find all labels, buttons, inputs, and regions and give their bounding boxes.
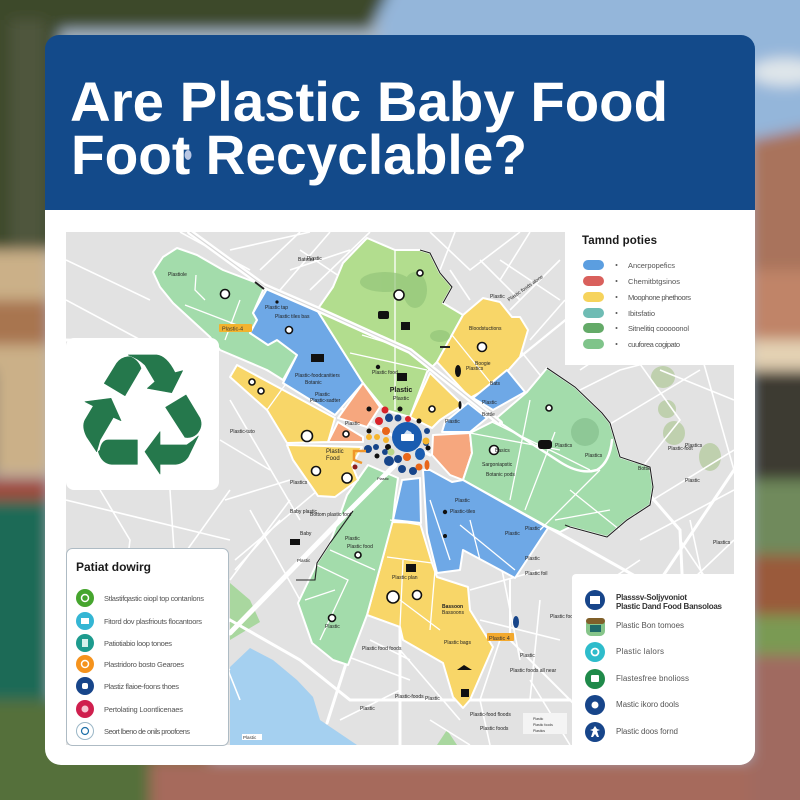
tiny map labels: Sargoniapstic [482, 462, 513, 468]
zone: west yellow [230, 365, 335, 443]
panel: bottom right legend: Plastic lalors [616, 647, 664, 656]
tiny map labels: Baby plastic [290, 509, 317, 515]
secondary roads [66, 319, 734, 745]
tiny map labels: Plastic [425, 696, 440, 702]
panel: bottom right legend: Plasssv-Soljyvoniot [616, 593, 687, 602]
panel: legend top right: Ancerpopefics [628, 261, 675, 270]
panel: bottom right legend: Flastesfree bnolioss [616, 674, 689, 683]
tiny map labels: Boogie [475, 361, 491, 367]
small map key: Plastic foods [533, 723, 553, 727]
tiny map labels: Bateau [298, 257, 314, 263]
panel: left legend: Plastridoro bosto Gearoes [104, 660, 184, 669]
tiny map labels: Plastic [345, 421, 360, 427]
panel: legend top right: Ibitsfatio [628, 309, 655, 318]
tiny map labels: Plastic foods all near [510, 668, 556, 674]
zone: east green [463, 368, 653, 537]
tiny map labels: Botanic pods [486, 472, 515, 478]
small map key: Plastic [533, 717, 544, 721]
tiny map labels: Bassoons [442, 610, 464, 616]
tiny map labels: Plastic-sadter [310, 398, 341, 404]
tiny map labels: Plastics [466, 366, 484, 372]
orange map tags: Plastic-4 [222, 326, 243, 332]
panel: legend top right [565, 222, 755, 365]
small map key: Plastics [533, 729, 545, 733]
zone: west salmon upper [338, 383, 380, 427]
tiny map labels: Plastic [490, 294, 505, 300]
zone: west salmon lower [328, 422, 363, 442]
darker lime patches [360, 272, 450, 342]
tiny map labels: Plastic food [372, 370, 398, 376]
title blemish [184, 150, 192, 160]
zone: south-west yellow [287, 445, 362, 497]
tiny map labels: Bottle [482, 412, 495, 418]
panel: bottom right legend: Plastic doos fornd [616, 727, 678, 736]
zone: north yellow [437, 298, 528, 398]
zone: south-east blue [423, 470, 548, 578]
orange map tags [219, 324, 519, 642]
panel: bottom right legend: Plastic Bon tomoes [616, 621, 684, 630]
panel: left legend: Pertolating Loontlicenaes [104, 705, 183, 714]
tiny map labels: Plastics [290, 480, 308, 486]
small map key [523, 713, 567, 734]
panel: legend top right: cuuforea cogipato [628, 340, 680, 349]
zone: south green [298, 465, 398, 665]
tiny map labels: Plastic foods [480, 726, 509, 732]
park patches [651, 366, 721, 471]
tiny map labels: Plastic tiles bas [275, 314, 310, 320]
tiny map labels: Plastic [297, 558, 311, 563]
panel: bottom right legend [572, 574, 755, 765]
zone: north-west blue [250, 287, 363, 415]
title [70, 70, 668, 186]
tiny map labels: Plastic [345, 536, 360, 542]
tiny map labels: Plastic [505, 531, 520, 537]
legend heading: Tamnd poties [582, 235, 657, 247]
water label [242, 734, 262, 740]
title: Foot Recyclable? [71, 123, 527, 186]
zone: inner blue [442, 403, 487, 432]
tiny map labels: Plastics [713, 540, 731, 546]
panel: left legend: Fitord dov plasfriouts flocantoors [104, 617, 202, 626]
zone: north-west green [153, 248, 297, 380]
tiny map labels: Bassoon [442, 604, 463, 610]
tiny map labels: Plastic [445, 419, 460, 425]
tiny map labels: Plastic food foods [362, 646, 402, 652]
main highways [190, 232, 612, 633]
zone: east salmon [432, 433, 472, 480]
tiny map labels: Plastic-foods [395, 694, 424, 700]
white content card [45, 210, 755, 765]
dark district outlines [255, 250, 653, 580]
tiny map labels: Plastic-tuto [230, 429, 255, 435]
panel: bottom right legend: Plastic Dand Food Bansoloas [616, 602, 723, 611]
tiny map labels: Bottle [638, 466, 651, 472]
panel: left legend: Plastiz flaioe-foons thoes [104, 682, 179, 691]
tiny map labels: Plastic [307, 256, 322, 262]
tiny map labels: Plastic [525, 526, 540, 532]
district zones [153, 238, 653, 708]
tiny map labels: Plastic [325, 624, 340, 630]
panel: legend top right: Sitnelitiq cooooonol [628, 324, 689, 333]
zone: inner yellow [410, 373, 463, 428]
tiny map labels: Plastic foots [550, 614, 577, 620]
tiny map labels: Bottom plastic foot [310, 512, 352, 518]
water label: Plastic [243, 735, 257, 740]
map pins and icons [220, 270, 552, 622]
header banner [45, 35, 755, 212]
tiny map labels: Plastic [482, 400, 497, 406]
map [66, 232, 734, 745]
tiny map labels: Baby [300, 531, 312, 537]
tiny map labels: Food [326, 456, 340, 462]
title: Are Plastic Baby Food [70, 70, 668, 133]
tiny map labels: Basics [495, 448, 510, 454]
tiny map labels: Plastic food [347, 544, 373, 550]
tiny map labels [168, 256, 731, 732]
tiny map labels: Plastic [393, 396, 409, 402]
tiny map labels: Plastic foil [525, 571, 548, 577]
tiny map labels: Plastic-food floods [470, 712, 511, 718]
tiny map labels: Plastics [585, 453, 603, 459]
icon: recycling symbol [84, 355, 201, 474]
panel: left legend: Seort lbeno de onils proofcens [104, 727, 190, 736]
left legend heading: Patiat dowirg [76, 560, 151, 574]
tiny map labels: Plastic [360, 706, 375, 712]
central hub with dots [352, 406, 430, 475]
tiny map labels: Plastic [525, 556, 540, 562]
east park patch [571, 418, 599, 446]
panel: left legend: Stlastifqastic oiopl top contanlons [104, 594, 204, 603]
tiny map labels: Bats [490, 381, 501, 387]
street grid [66, 232, 734, 745]
recycling panel [66, 338, 219, 490]
tiny map labels: Plastic [390, 387, 412, 394]
zone: north lime [317, 238, 463, 417]
panel: left legend [66, 548, 228, 746]
tiny map labels: Plastic plan [392, 575, 418, 581]
tiny map labels: Plastics [555, 443, 573, 449]
tiny map labels: Plastic [520, 653, 535, 659]
zone: north-east blue [473, 370, 525, 410]
tiny map labels: Plastic-foot [668, 446, 693, 452]
tiny map labels: Plastiole [168, 272, 187, 278]
tiny map labels: Plastic [315, 392, 330, 398]
tiny map labels: Plastic-tiles [450, 509, 476, 515]
water [230, 648, 357, 745]
tiny map labels: Plastic bags [444, 640, 471, 646]
zone: south yellow [367, 522, 493, 708]
panel: legend top right: Chemitbtgsinos [628, 277, 680, 286]
zone: south blue [393, 478, 421, 523]
tiny map labels: Plastic [377, 476, 389, 481]
hub [392, 422, 422, 452]
tiny map labels: Plastic foods alone [507, 274, 545, 303]
orange map tags: Plastic 4 [489, 636, 510, 642]
legend row: heading [585, 590, 605, 610]
tiny map labels: Bloodstuctions [469, 326, 502, 332]
tiny map labels: Plastic tap [265, 305, 288, 311]
tiny map labels: Plastics [685, 443, 703, 449]
tiny map labels: Plastic [455, 498, 470, 504]
tiny map labels: Plastic [326, 449, 344, 455]
zone inner streets [185, 250, 620, 640]
panel: bottom right legend: Mastic ikoro dools [616, 700, 679, 709]
tiny map labels: Botanic [305, 380, 322, 386]
panel: left legend: Patiotiabio loop tonoes [104, 639, 172, 648]
tiny map labels: Plastic [685, 478, 700, 484]
tiny map labels: Plastic-foodcanitiers [295, 373, 340, 379]
panel: legend top right: Moophone phethoors [628, 293, 691, 302]
